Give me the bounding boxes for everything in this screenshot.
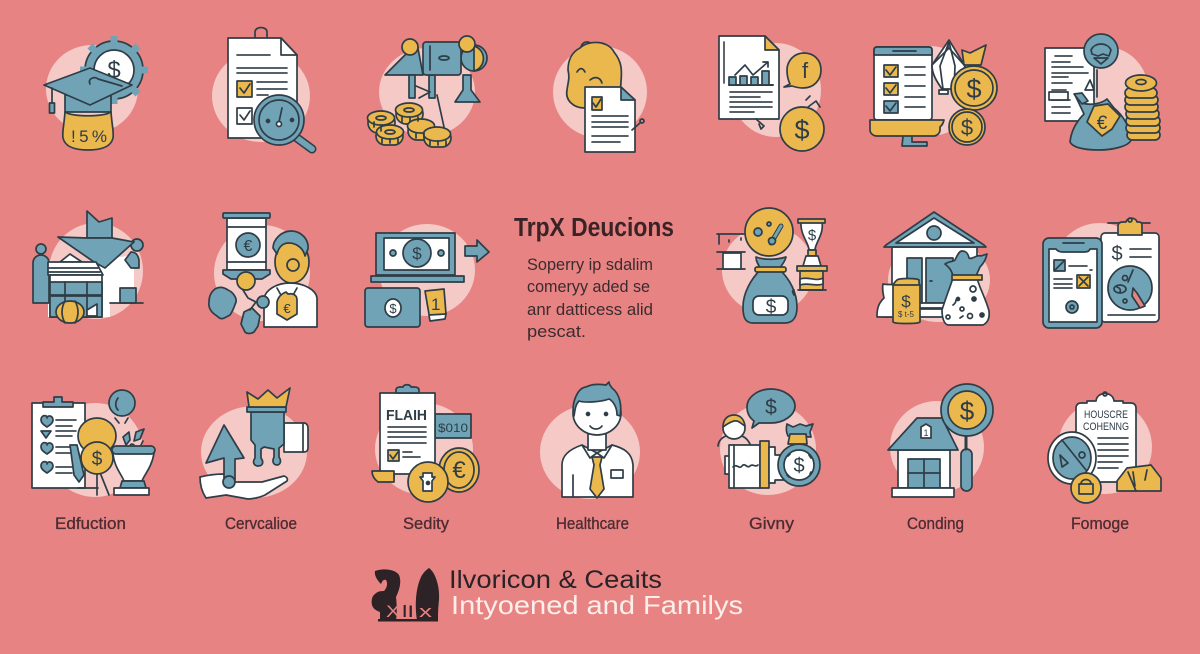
icon: banknote on laptop, arrow, tablet: $ (412, 244, 422, 263)
body text: Soperry ip sdalim (527, 255, 653, 274)
icon: giving person, chest and coin: $ (765, 396, 777, 419)
icon: money bag and hourglass: $ (808, 227, 817, 244)
label: Edfuction: Edfuction (55, 515, 126, 533)
icon: report chart and coins: $ (794, 115, 810, 145)
icon: person with tie (540, 382, 640, 533)
icon: education clipboard, coins and mortar (32, 390, 155, 533)
logo mark: x (419, 602, 433, 621)
label: Cervcalioe: Cervcalioe (225, 515, 297, 533)
icon: house with people and flag (33, 211, 143, 323)
icon: banknote on laptop, arrow, tablet: 1 (431, 295, 440, 314)
icon: house with magnifier: $ (960, 396, 975, 426)
icon: clipboard with bill and euro coins: € (452, 457, 466, 484)
icon: money bag and hourglass (717, 208, 827, 323)
label: Fomoge: Fomoge (1071, 515, 1129, 533)
icon: home care clipboard with coin and tag: COHENNG (1083, 421, 1129, 433)
icon: graduation cap, gear and percent jar: ! 5 % (71, 127, 107, 146)
heading: TrpX Deucions (514, 214, 674, 242)
label: Healthcare: Healthcare (556, 515, 629, 533)
icon: clipboard with bill and euro coins: FLAIH (386, 407, 427, 424)
icon: phone and clipboard: $ (1111, 243, 1123, 265)
icon: checklist document with magnifier (212, 28, 312, 149)
icon: graduation cap, gear and percent jar: $ (107, 57, 121, 84)
icon: house with magnifier: 1 (923, 428, 929, 438)
icon: banknote on laptop, arrow, tablet (365, 224, 489, 327)
icon: banknote on laptop, arrow, tablet: $ (389, 301, 397, 316)
logo mark: lI (402, 602, 414, 621)
text block: tax deductions (514, 214, 674, 341)
label: Sedity: Sedity (403, 515, 450, 533)
body text: pescat. (527, 322, 586, 341)
icon: house with magnifier (888, 384, 993, 533)
icon: clipboard with bill and euro coins: $010 (438, 421, 468, 435)
icon: phone and clipboard (1043, 218, 1159, 328)
icon: education clipboard, coins and mortar: $ (92, 449, 103, 470)
footer logo (372, 566, 743, 622)
logo mark (372, 568, 439, 622)
icon: bank building with jar and bags: $ t-5 (898, 310, 915, 319)
icon: report chart and coins: f (802, 58, 809, 83)
body text: anr datticess alid (527, 300, 653, 319)
footer subtitle: Intyoened and Familys (451, 590, 743, 620)
icon: invoice, euro bag and coin stack: € (1097, 113, 1108, 134)
icon: machine over stacks of coins (368, 36, 487, 147)
icon: home care clipboard with coin and tag (1048, 392, 1161, 533)
body text: comeryy aded se (527, 277, 650, 296)
icon: bank building with jar and bags: $ (901, 292, 911, 311)
logo mark: X (386, 602, 400, 621)
icon: giving person, chest and coin (718, 389, 820, 533)
icon: graduation cap, gear and percent jar (44, 36, 148, 150)
icon: scroll, euro coin and person (209, 213, 317, 334)
icon: scroll, euro coin and person: € (244, 238, 253, 255)
label: Givny: Givny (749, 515, 795, 533)
icon: monitor checklist with balloon and coins: $ (961, 115, 973, 140)
icon: crown, arrow and open hand (200, 388, 308, 533)
icon: report chart and coins (719, 36, 824, 151)
icon: clipboard with bill and euro coins (372, 385, 479, 533)
icon: bank building with jar and bags (877, 212, 990, 325)
footer title: Ilvoricon & Ceaits (449, 566, 662, 594)
icon: giving person, chest and coin: $ (793, 455, 805, 477)
body text (527, 255, 653, 341)
icon: money bag and hourglass: $ (766, 297, 777, 318)
icon: yellow blob with document (553, 42, 647, 152)
icon: invoice, euro bag and coin stack (1045, 34, 1160, 150)
icon: monitor checklist with balloon and coins: $ (966, 74, 982, 104)
label: Conding: Conding (907, 515, 964, 533)
icon: home care clipboard with coin and tag: HOUSCRE (1084, 409, 1128, 421)
icon: monitor checklist with balloon and coins (870, 40, 997, 146)
icon: scroll, euro coin and person: € (283, 301, 291, 316)
